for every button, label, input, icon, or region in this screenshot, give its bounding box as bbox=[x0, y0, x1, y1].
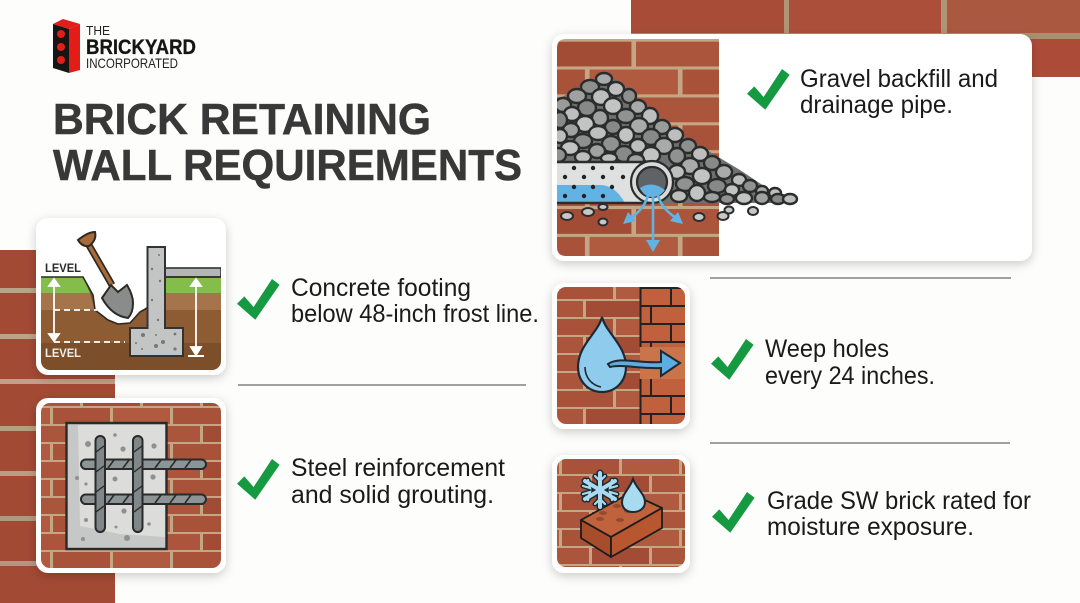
pebbles bbox=[561, 204, 758, 226]
icon: check bbox=[237, 459, 280, 500]
requirement: weep holes bbox=[711, 335, 935, 390]
illustration: footing cross-section: LEVEL bbox=[45, 261, 81, 275]
logo: THE bbox=[86, 23, 110, 38]
requirement: steel reinforcement: and solid grouting. bbox=[291, 481, 494, 509]
icon: shovel bbox=[78, 232, 133, 318]
panel: gravel backfill bbox=[550, 34, 1032, 261]
rebar bars bbox=[81, 436, 206, 532]
brick backdrop bbox=[557, 39, 719, 256]
icon: check bbox=[237, 279, 280, 320]
requirement: concrete footing bbox=[237, 274, 539, 328]
illustration: water drop through wall bbox=[557, 287, 685, 424]
icon: check bbox=[712, 492, 755, 533]
illustration: footing cross-section: LEVEL bbox=[45, 346, 81, 360]
arrow: water out bbox=[608, 351, 680, 376]
illustration: brick with snowflake and drop bbox=[557, 459, 685, 567]
requirement: weep holes: Weep holes bbox=[765, 335, 889, 363]
icon: check bbox=[747, 69, 790, 110]
illustration: footing cross-section bbox=[41, 232, 221, 370]
requirement: grade SW brick bbox=[712, 487, 1031, 541]
title bbox=[53, 95, 522, 190]
panel: grade SW brick bbox=[552, 455, 690, 573]
measurement arrows bbox=[49, 279, 204, 356]
title: WALL REQUIREMENTS bbox=[53, 141, 522, 190]
requirement: gravel backfill: Gravel backfill and bbox=[800, 65, 998, 93]
requirement: steel reinforcement bbox=[237, 454, 505, 509]
requirement: grade SW brick: Grade SW brick rated for bbox=[767, 487, 1031, 515]
icon: snowflake bbox=[583, 473, 617, 507]
requirement: gravel backfill: drainage pipe. bbox=[800, 91, 953, 119]
icon: water drop bbox=[622, 479, 645, 512]
requirement: gravel backfill bbox=[747, 65, 998, 119]
panel: concrete footing bbox=[36, 218, 226, 375]
requirement: concrete footing: Concrete footing bbox=[291, 274, 471, 302]
concrete wall and footing bbox=[130, 247, 183, 356]
icon: logo brick bbox=[53, 19, 80, 73]
water arrows bbox=[623, 195, 683, 252]
logo: INCORPORATED bbox=[86, 55, 178, 71]
illustration: gravel pile bbox=[550, 73, 797, 226]
requirement: concrete footing: below 48-inch frost line. bbox=[291, 300, 539, 328]
requirement: grade SW brick: moisture exposure. bbox=[767, 513, 974, 541]
title: BRICK RETAINING bbox=[53, 95, 431, 144]
illustration: rebar in concrete bbox=[41, 403, 221, 568]
panel: weep holes bbox=[552, 283, 690, 429]
brick band: top right bbox=[631, 0, 1080, 77]
logo: BRICKYARD bbox=[86, 36, 196, 59]
icon: check bbox=[711, 339, 754, 380]
requirement: weep holes: every 24 inches. bbox=[765, 362, 935, 390]
requirement: steel reinforcement: Steel reinforcement bbox=[291, 454, 505, 482]
logo bbox=[53, 19, 196, 73]
icon: brick bbox=[581, 493, 662, 557]
panel: steel reinforcement bbox=[36, 398, 226, 573]
brick band: left bbox=[0, 250, 115, 603]
illustration: perforated drain pipe bbox=[557, 161, 673, 203]
